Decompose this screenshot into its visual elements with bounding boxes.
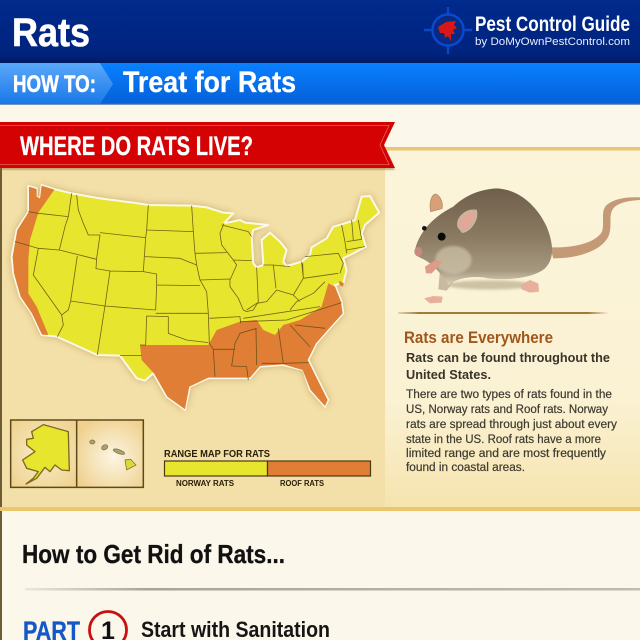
map shadow (12, 185, 379, 410)
panel: map background (0, 160, 385, 508)
legend label: roof rats: ROOF RATS (280, 479, 325, 488)
Hawaii islands (90, 440, 136, 470)
rat paw (425, 259, 442, 273)
Hawaii panel (77, 420, 143, 487)
rat near foot and leg (424, 296, 443, 303)
rat body (415, 188, 552, 285)
text body: There are two types of rats found in the (406, 389, 612, 401)
rat illustration (414, 188, 640, 303)
icon: crosshair logo (424, 7, 472, 54)
text body: US, Norway rats and Roof rats. Norway (406, 404, 608, 416)
Alaska panel (11, 420, 77, 487)
text body: found in coastal areas. (406, 462, 525, 474)
part 1 heading (23, 612, 330, 640)
rat front leg (438, 270, 460, 291)
legend bar: Norway rats (164, 461, 268, 476)
rat eyes (438, 233, 446, 241)
rat tail (550, 197, 640, 258)
how-to chevron (0, 63, 113, 104)
how-to title: Treat for Rats (123, 66, 296, 99)
text body: rats are spread through just about every (406, 419, 617, 431)
legend label: Norway rats: NORWAY RATS (176, 479, 235, 488)
section heading: How to Get Rid of Rats... (22, 539, 285, 569)
inset: Alaska and Hawaii (11, 420, 143, 487)
gold rule top (385, 147, 640, 150)
rat face shading (435, 246, 472, 274)
gold rule bottom (0, 507, 640, 511)
rat nose (414, 247, 422, 256)
rat near ear (458, 211, 476, 232)
inset frame (11, 420, 143, 487)
how-to label: HOW TO: (13, 71, 96, 98)
Delmarva patch (339, 281, 344, 287)
how-to bar (0, 63, 640, 105)
rule under rat (398, 312, 609, 314)
logo text (475, 13, 630, 48)
US range map (12, 185, 379, 410)
text heading: Rats are Everywhere (404, 328, 553, 347)
left edge stroke (0, 160, 2, 640)
divider (25, 588, 640, 590)
ribbon heading: WHERE DO RATS LIVE? (20, 131, 253, 161)
south: roof rats range (140, 283, 343, 409)
ribbon heading (0, 122, 395, 170)
header band (0, 0, 640, 64)
text body: state in the US. Roof rats have a more (406, 434, 601, 446)
contiguous states: Norway rats range (12, 185, 379, 410)
rat far ear (430, 194, 442, 212)
page title: Rats (12, 11, 90, 55)
legend bar: roof rats (268, 461, 370, 476)
rats are everywhere text block (404, 328, 617, 474)
text subheading (406, 351, 610, 382)
rat shadow (447, 280, 533, 290)
rat far foot (521, 280, 539, 293)
text subheading: United States. (406, 368, 491, 382)
logo text: by DoMyOwnPestControl.com (475, 36, 630, 48)
map legend (164, 449, 370, 488)
panel: rat description background (385, 148, 640, 508)
text subheading: Rats can be found throughout the (406, 351, 610, 365)
legend title: RANGE MAP FOR RATS (164, 449, 270, 460)
text body (406, 389, 617, 474)
text body: limited range and are most frequently (406, 448, 606, 460)
Alaska shape (23, 425, 69, 484)
west coast: roof rats range (13, 186, 54, 335)
state borders (15, 193, 365, 380)
part number circle (90, 612, 126, 640)
